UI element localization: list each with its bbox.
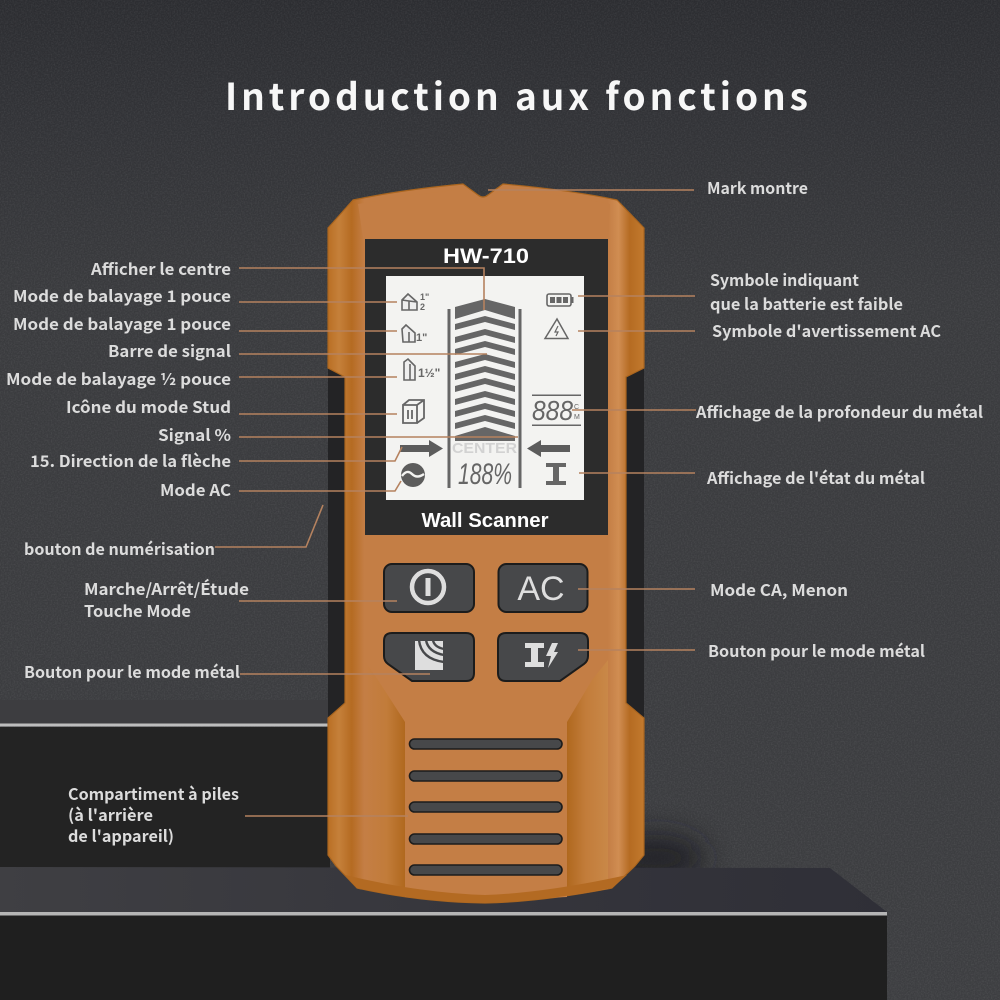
top face <box>358 189 610 245</box>
signal chevrons <box>455 299 515 441</box>
AC button: AC <box>517 570 565 608</box>
AC mode icon <box>401 463 425 487</box>
left labels: Signal % <box>158 422 231 446</box>
centre label: CENTER <box>452 440 517 457</box>
left labels: de l'appareil) <box>68 823 174 847</box>
bottom lip <box>345 875 627 903</box>
metal mode button <box>384 633 474 681</box>
model name: HW-710 <box>443 245 529 268</box>
depth readout: M <box>574 414 580 421</box>
scan mode 1/2 icon: 2 <box>420 302 425 312</box>
product name: Wall Scanner <box>422 510 549 532</box>
right labels: Symbole indiquant <box>710 267 859 291</box>
side grips <box>328 367 644 717</box>
metal scan button <box>498 633 588 681</box>
scan mode 1 1/2 inch icon <box>404 359 440 380</box>
depth readout: 888 <box>532 395 573 426</box>
AC button <box>498 564 588 612</box>
orange housing <box>328 184 644 903</box>
left direction arrow <box>400 440 443 457</box>
right labels: Bouton pour le mode métal <box>708 638 925 662</box>
LCD panel <box>386 276 584 500</box>
scan mode 1 inch icon <box>402 325 427 344</box>
left labels <box>6 256 249 847</box>
right labels: que la batterie est faible <box>710 291 903 315</box>
device shadow <box>605 834 705 882</box>
left labels: bouton de numérisation <box>24 536 215 560</box>
lower left facet <box>364 660 405 896</box>
left labels: Barre de signal <box>108 338 231 362</box>
signal percent: 188% <box>458 458 512 491</box>
lower shelf <box>0 867 887 1000</box>
left labels: Bouton pour le mode métal <box>24 659 240 683</box>
right labels: Symbole d'avertissement AC <box>712 318 942 342</box>
left labels: Mode de balayage 1 pouce <box>13 311 231 335</box>
right labels: Affichage de l'état du métal <box>706 465 925 489</box>
stud mode icon <box>403 400 424 423</box>
left labels: Mode de balayage 1 pouce <box>13 283 231 307</box>
left labels: Touche Mode <box>84 598 191 622</box>
screen bezel <box>365 239 608 535</box>
battery icon <box>547 294 574 306</box>
right labels: Affichage de la profondeur du métal <box>695 399 983 423</box>
left labels: Mode AC <box>160 477 232 501</box>
power button <box>384 564 474 612</box>
lower right facet <box>567 660 608 896</box>
title: Introduction aux fonctions <box>225 67 808 121</box>
signal rails <box>448 309 522 488</box>
battery compartment vents <box>410 739 562 875</box>
right labels: Mode CA, Menon <box>710 577 848 601</box>
right labels <box>695 175 983 662</box>
AC warning icon <box>545 319 568 338</box>
left labels: Marche/Arrêt/Étude <box>84 576 249 600</box>
scan mode 1/2 icon <box>402 292 429 312</box>
left labels: 15. Direction de la flèche <box>30 448 231 472</box>
left labels: (à l'arrière <box>68 802 153 826</box>
left labels: Mode de balayage ½ pouce <box>6 366 231 390</box>
depth readout: C <box>574 404 579 411</box>
metal status icon <box>546 463 566 485</box>
scan mode 1 inch icon: 1" <box>416 332 427 344</box>
lower centre panel <box>364 660 608 900</box>
left labels: Compartiment à piles <box>68 781 239 805</box>
device: wall scanner <box>328 184 644 903</box>
left labels: Afficher le centre <box>90 256 231 280</box>
left labels: Icône du mode Stud <box>66 394 231 418</box>
callout lines <box>215 190 696 816</box>
upper shelf <box>0 700 330 868</box>
right labels: Mark montre <box>707 175 808 199</box>
scan mode 1/2 icon: 1" <box>420 292 429 302</box>
scan mode 1 1/2 inch icon: 1½" <box>418 366 440 380</box>
right direction arrow <box>527 440 570 457</box>
